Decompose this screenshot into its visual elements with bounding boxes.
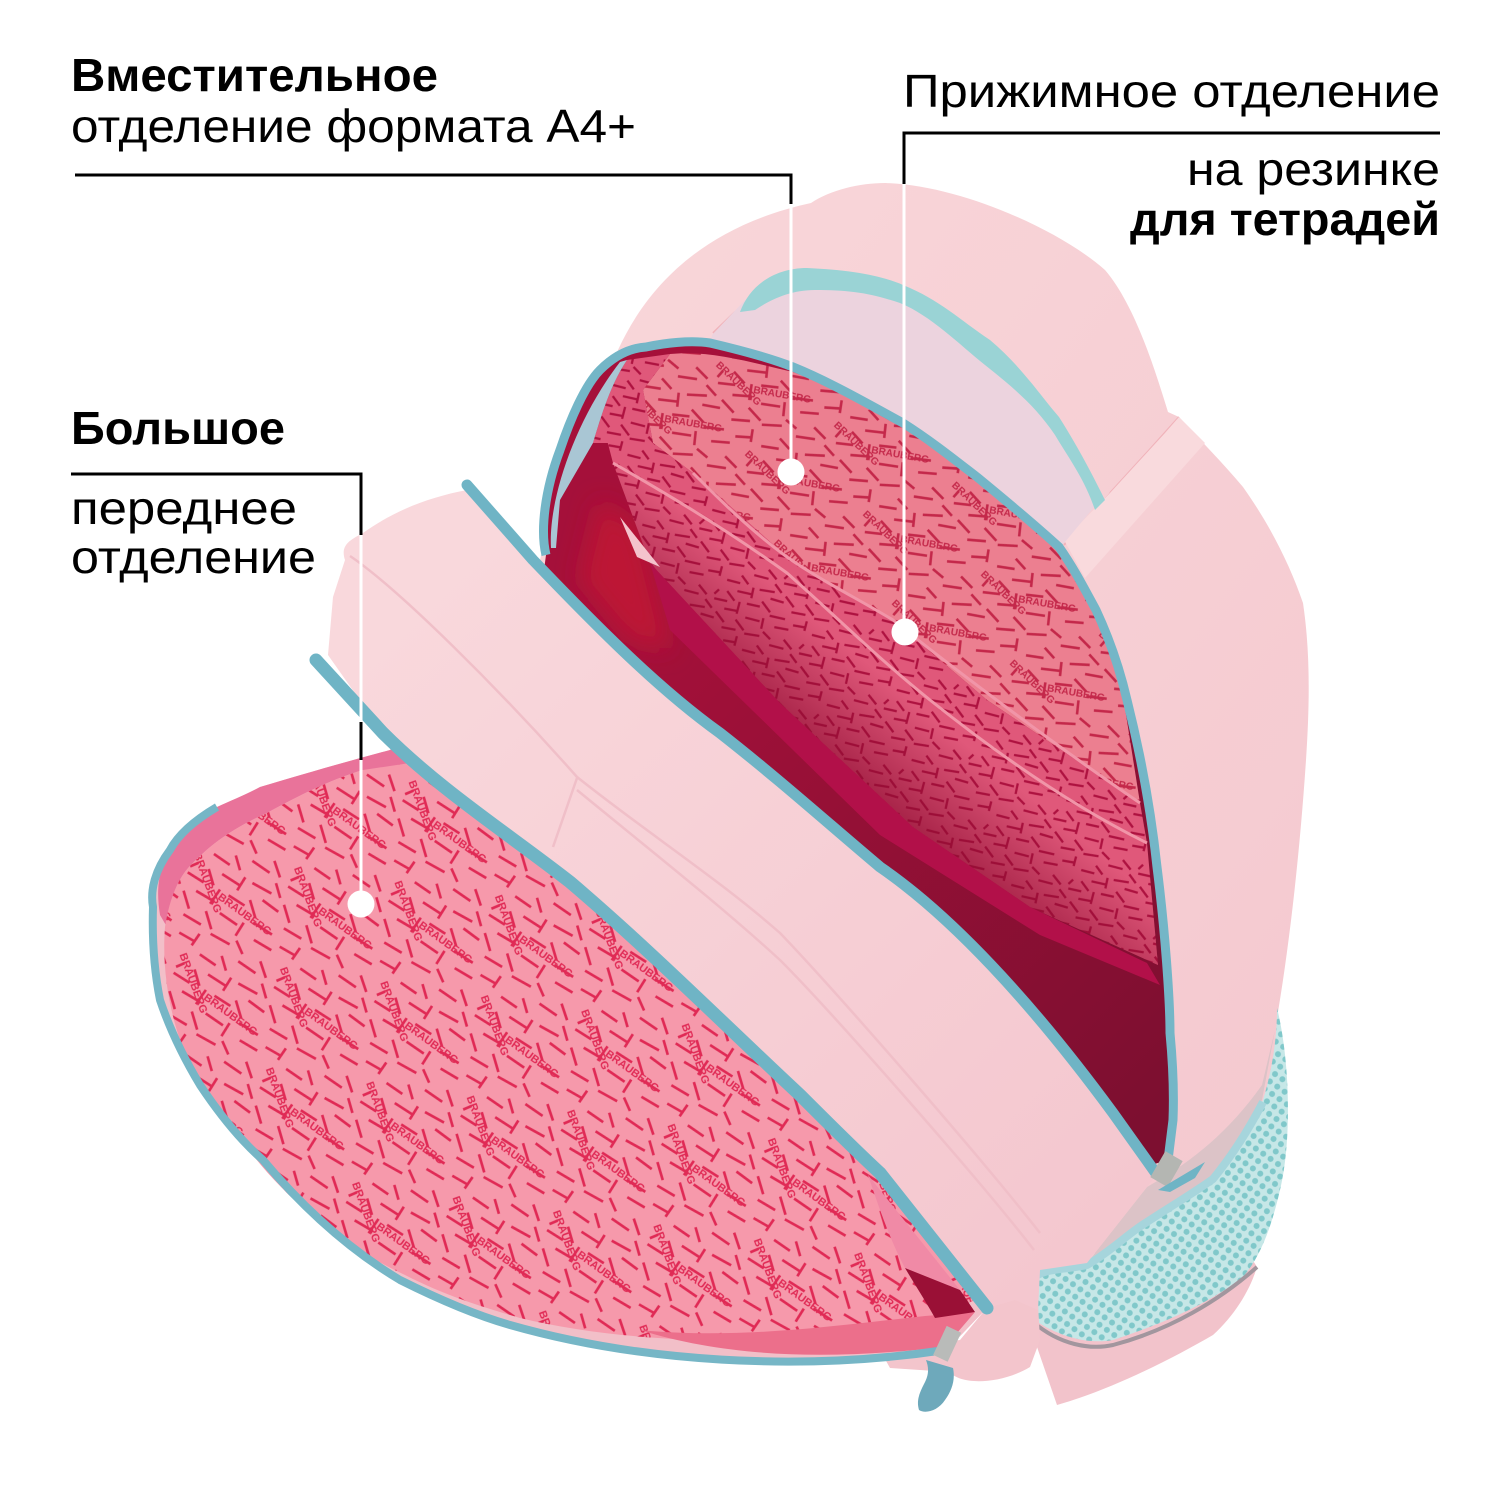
flap satin inner rim — [158, 735, 430, 927]
front pocket body — [328, 490, 1155, 1310]
inner zipper of front pocket — [467, 485, 1155, 1172]
mesh binding — [1032, 1102, 1263, 1280]
centre bottom of backpack — [880, 1250, 1040, 1381]
handle base strap — [1064, 417, 1205, 578]
magenta inner pocket — [650, 563, 1160, 985]
heading: Большое — [71, 402, 285, 454]
marker dot — [892, 618, 918, 646]
outer zipper of front pocket — [316, 660, 987, 1308]
marker dot — [348, 890, 374, 918]
flap outer zipper — [152, 807, 945, 1362]
main compartment zipper — [544, 342, 1173, 1160]
leader line — [904, 133, 1440, 184]
back shell of backpack — [540, 183, 1309, 1260]
leader line — [71, 474, 361, 760]
flap outer rim — [152, 735, 987, 1362]
pocket fold seam — [350, 556, 1040, 1233]
main compartment interior — [540, 342, 1173, 1180]
pocket crease — [553, 778, 1034, 1250]
leader line — [75, 175, 791, 204]
heading: Прижимное отделение — [903, 65, 1440, 117]
bottom base of backpack — [1037, 1240, 1257, 1405]
main zipper slider — [1150, 1151, 1205, 1192]
subheading line two: отделение — [71, 531, 316, 583]
flap zipper pull — [918, 1326, 961, 1412]
folder divider lining — [613, 463, 1158, 965]
flap satin binding — [640, 1312, 975, 1355]
callout: roomy A4+ compartment — [71, 49, 804, 486]
callout: large front compartment — [71, 402, 374, 918]
back wall lining with brand pattern — [643, 353, 1140, 803]
folder shading — [613, 463, 1158, 965]
notebook elastic pocket — [607, 440, 1147, 843]
top handle seams — [713, 312, 1179, 545]
flap lining with brand pattern — [164, 760, 975, 1340]
white tag — [620, 517, 660, 567]
side mesh pocket — [1030, 1008, 1288, 1347]
blue zipper tape inside — [551, 360, 627, 548]
red side wall — [580, 500, 670, 650]
open front flap — [152, 735, 987, 1362]
handle strap mesh — [740, 268, 1105, 510]
dark gap near zipper end — [905, 1268, 975, 1318]
bold subheading: для тетрадей — [1130, 193, 1440, 245]
callout: elastic notebook compartment — [892, 65, 1440, 646]
stitched edge highlights — [613, 463, 1147, 843]
inner gusset pink — [868, 1175, 960, 1290]
side pocket gusset — [1087, 1030, 1275, 1263]
left wall lining — [593, 354, 670, 443]
marker dot — [778, 458, 804, 486]
heading: Вместительное — [71, 49, 438, 101]
grey trim — [1033, 1267, 1257, 1347]
subheading line one: переднее — [71, 482, 297, 534]
subheading: на резинке — [1187, 143, 1440, 195]
handle inner panel — [710, 288, 1100, 548]
subheading: отделение формата А4+ — [71, 100, 636, 152]
